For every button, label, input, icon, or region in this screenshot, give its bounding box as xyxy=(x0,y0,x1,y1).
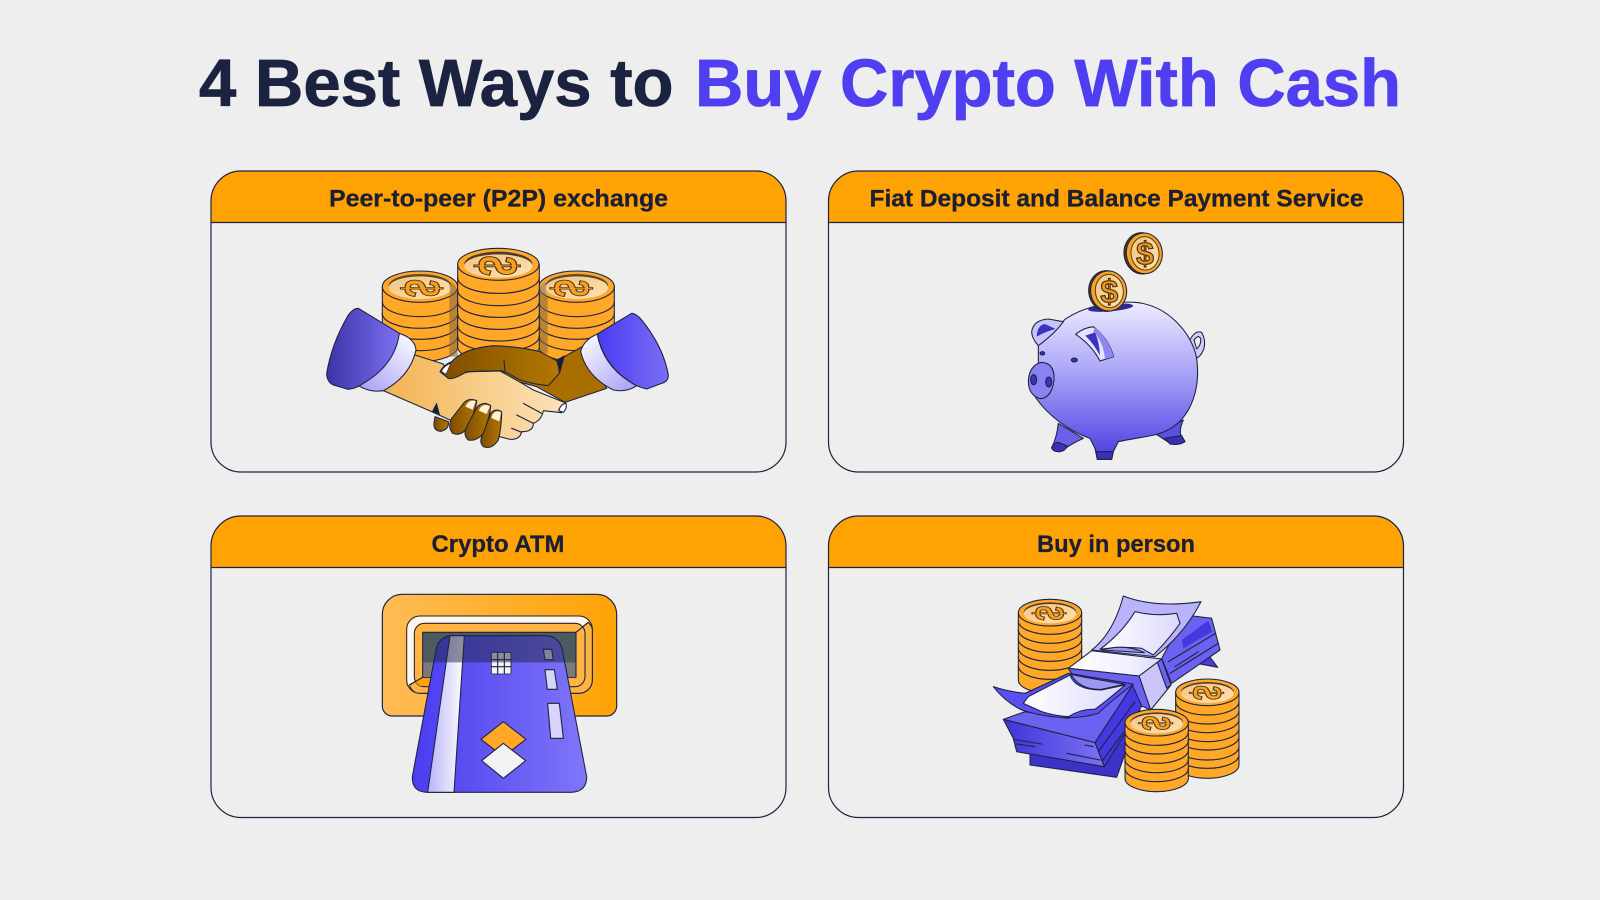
upper back pile xyxy=(1162,615,1220,683)
front coin stack: $ xyxy=(1132,716,1178,731)
left coin stack: $ xyxy=(392,280,451,297)
band side xyxy=(1139,659,1171,710)
left ear xyxy=(1032,319,1063,346)
panel: buy in person xyxy=(828,516,1404,818)
panel outline: crypto ATM xyxy=(211,568,786,818)
icon: cash bundle and coin stacks xyxy=(993,596,1239,792)
snout xyxy=(1028,362,1054,399)
blue strap xyxy=(1068,668,1151,710)
lower bundle side xyxy=(1095,684,1142,767)
pig tail xyxy=(1190,332,1205,358)
right coin stack xyxy=(539,271,614,362)
center coin stack xyxy=(458,248,539,362)
title: 4 Best Ways to xyxy=(199,46,674,121)
bank card xyxy=(412,636,587,792)
panel outline: buy in person xyxy=(828,568,1404,818)
panel outline: peer-to-peer xyxy=(211,222,786,472)
panel: crypto ATM xyxy=(211,516,786,818)
bottom shadow bundle xyxy=(1030,717,1138,777)
panel: fiat deposit and balance payment service xyxy=(828,171,1404,472)
heading: fiat deposit: Fiat Deposit and Balance Payment Service xyxy=(870,186,1364,212)
panel header: peer-to-peer xyxy=(211,171,786,222)
slot xyxy=(1088,302,1134,313)
back legs xyxy=(1052,420,1185,452)
right sleeve xyxy=(597,313,668,389)
panel header: crypto ATM xyxy=(211,516,786,568)
panel: peer-to-peer exchange xyxy=(211,171,786,472)
card shaded top xyxy=(434,636,565,662)
paper band xyxy=(1068,651,1162,676)
logo diamonds xyxy=(481,722,526,778)
ATM body xyxy=(382,594,617,716)
heading: peer-to-peer: Peer-to-peer (P2P) exchange xyxy=(329,186,668,212)
right ear xyxy=(1076,327,1114,361)
eyes xyxy=(1040,352,1077,362)
falling coin xyxy=(1122,231,1164,276)
back coin stack: $ xyxy=(1025,606,1071,621)
right coin stack: $ xyxy=(1183,686,1228,700)
coin in slot xyxy=(1087,269,1129,313)
lower bundle top xyxy=(1003,684,1133,743)
title xyxy=(199,46,1401,121)
left coin stack xyxy=(382,271,458,362)
right sleeve cuff xyxy=(581,334,637,391)
heading: crypto ATM: Crypto ATM xyxy=(432,531,564,558)
dark arm and hand xyxy=(487,346,607,402)
dark fingers xyxy=(434,399,502,447)
heading: buy in person: Buy in person xyxy=(1037,531,1195,558)
dark thumb over hand xyxy=(440,346,559,386)
card chip xyxy=(491,652,511,674)
rear loose note xyxy=(1188,655,1218,667)
right coin stack: $ xyxy=(542,280,600,297)
back coin stack xyxy=(1018,599,1082,693)
center coin stack: $ xyxy=(466,256,530,276)
icon: card entering ATM xyxy=(382,594,617,792)
upper note xyxy=(1092,596,1201,657)
cash bundle xyxy=(993,596,1220,777)
card stripe xyxy=(428,636,464,792)
left sleeve xyxy=(327,308,399,389)
front coin stack xyxy=(1125,709,1188,792)
icon: piggy bank with coins xyxy=(1028,231,1205,459)
lower note xyxy=(993,673,1133,718)
lower bundle front xyxy=(1003,719,1104,767)
card marks xyxy=(543,649,563,738)
panel header: buy in person xyxy=(828,516,1404,568)
front foot xyxy=(1096,452,1113,459)
thumb nail xyxy=(559,403,566,412)
coin in slot: $ xyxy=(1100,273,1118,309)
card slot xyxy=(407,616,592,693)
icon: handshake with coin stacks xyxy=(327,248,668,447)
dark shadow notches xyxy=(432,355,565,415)
panel header: fiat deposit xyxy=(828,171,1404,222)
falling coin: $ xyxy=(1136,235,1154,271)
right coin stack xyxy=(1176,679,1239,778)
pig body xyxy=(1029,302,1198,459)
title: Buy Crypto With Cash xyxy=(695,46,1401,121)
left sleeve cuff xyxy=(358,333,416,391)
light arm and hand xyxy=(383,355,566,439)
panel outline: fiat deposit xyxy=(828,222,1404,472)
